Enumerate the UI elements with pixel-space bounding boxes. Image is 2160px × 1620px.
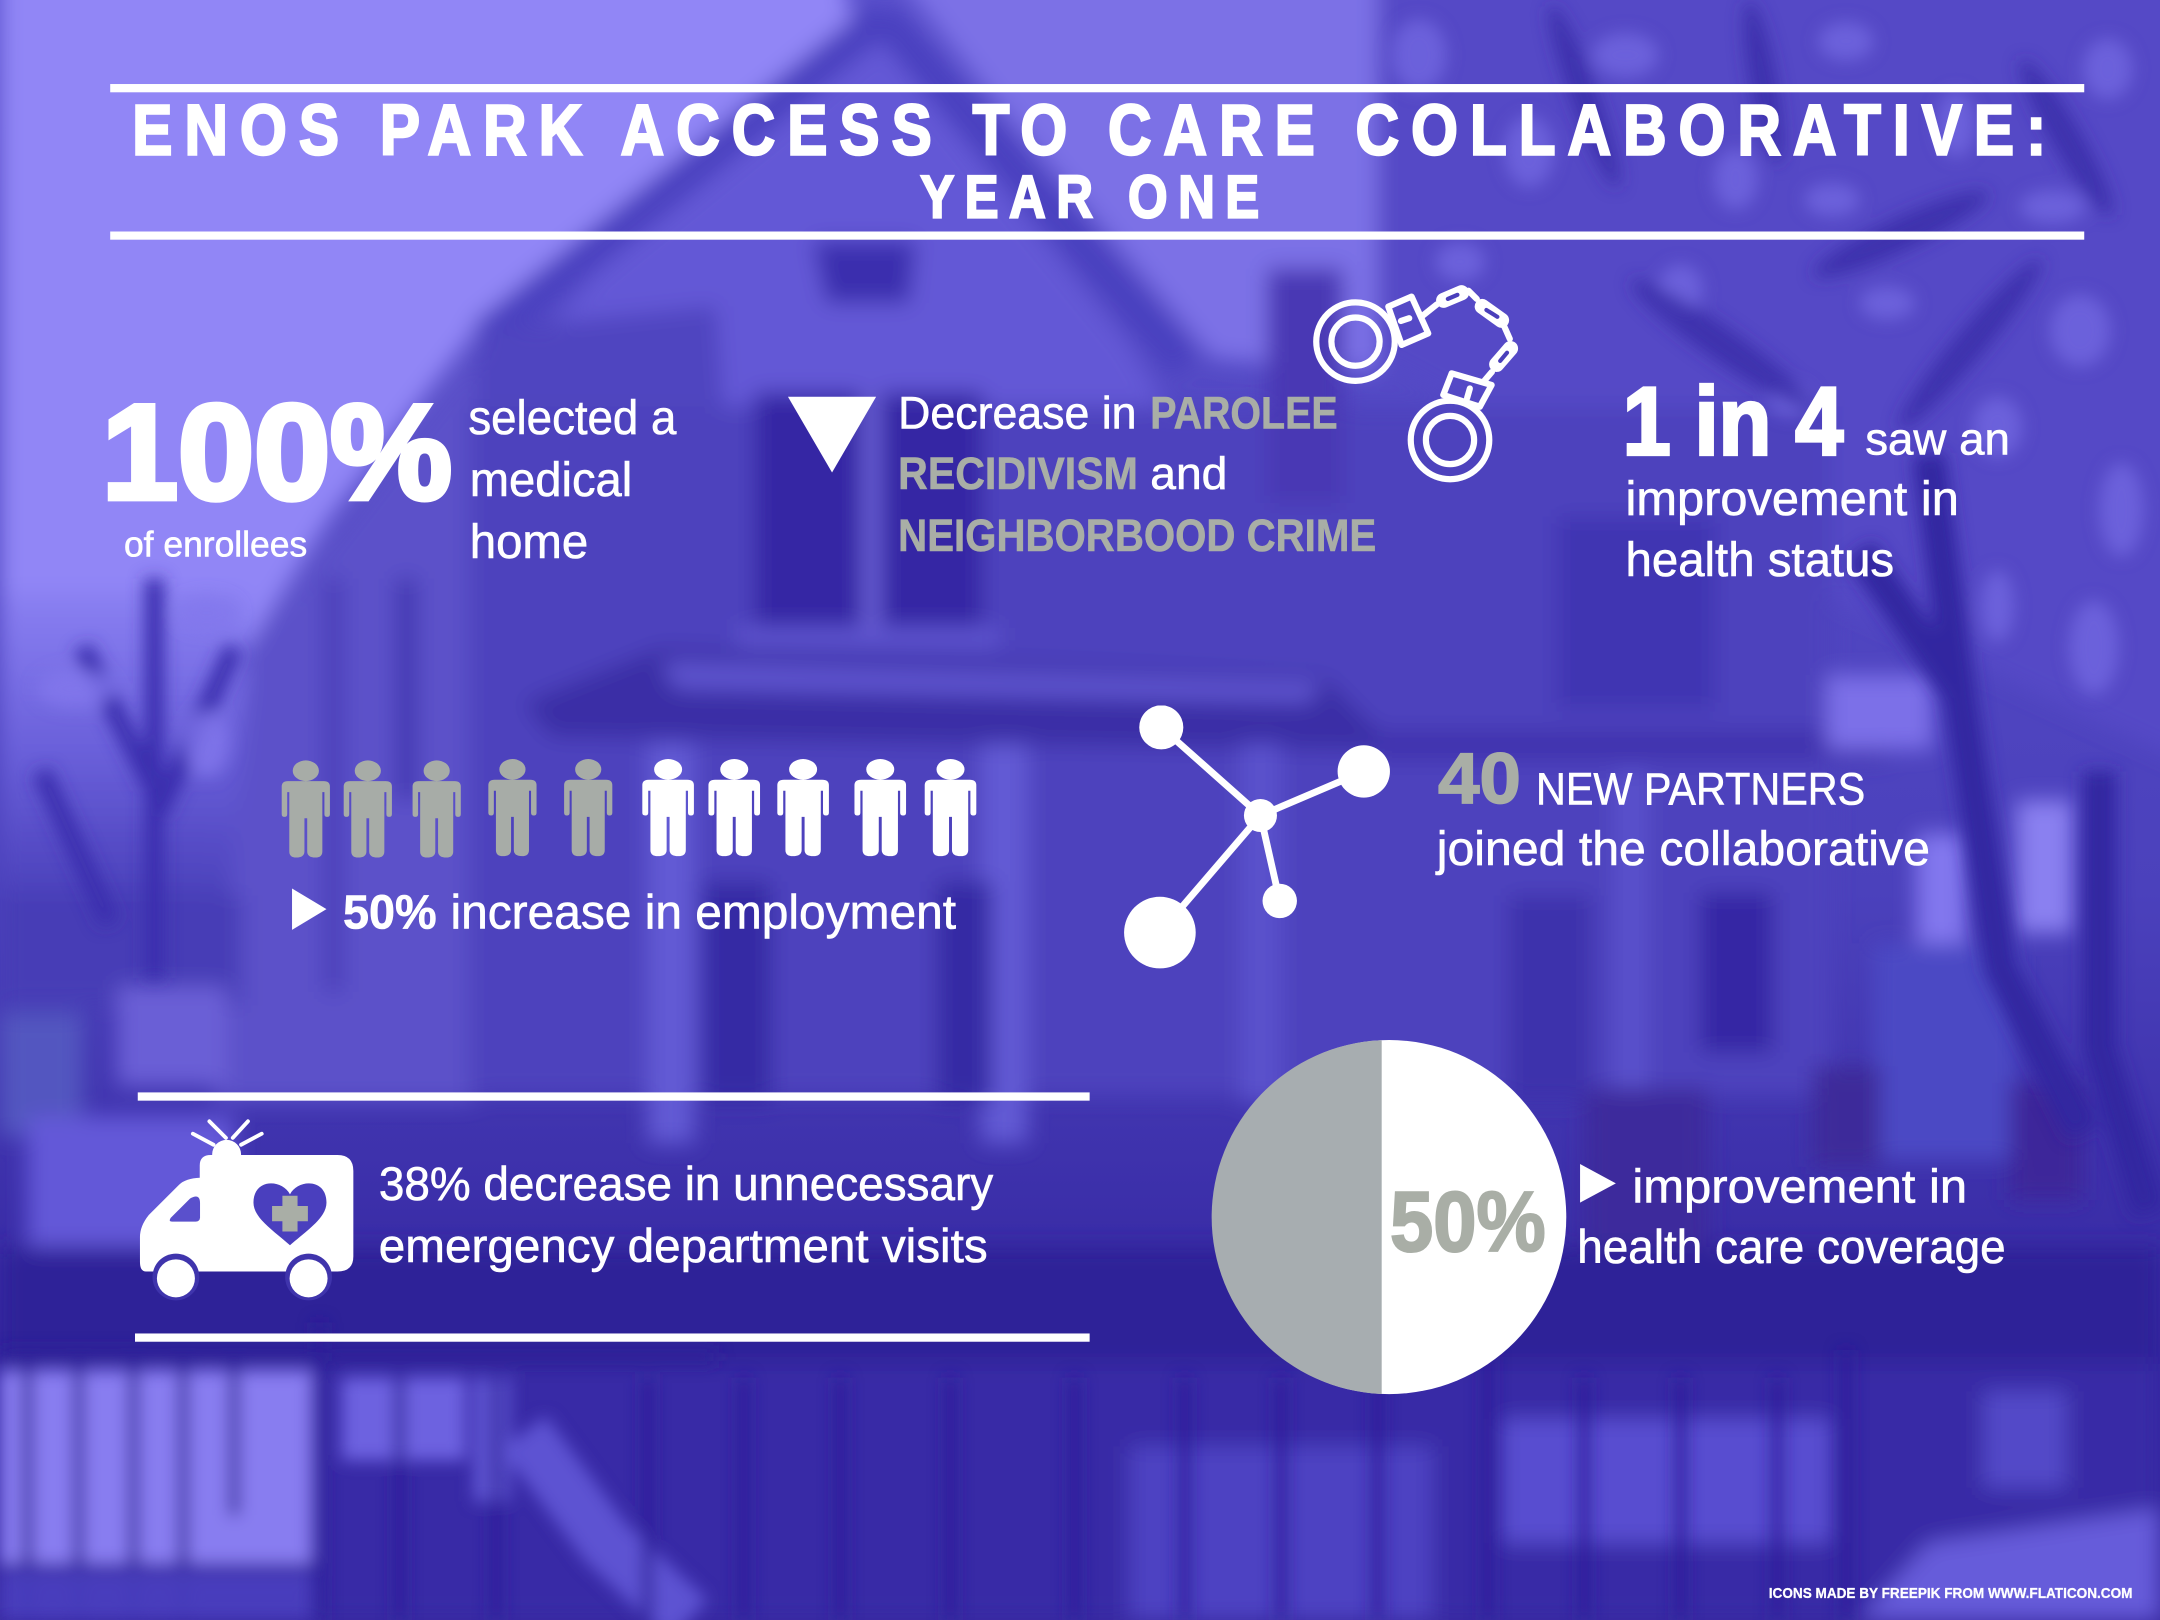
icon: right triangle — [1580, 1164, 1616, 1203]
stat: 50 percent increase in employment: 50% — [343, 885, 437, 939]
stat: 40 new partners — [1435, 739, 1930, 876]
pie chart: 50 percent health care coverage: 50% — [1390, 1175, 1546, 1270]
stat: 40 new partners: NEW PARTNERS — [1536, 763, 1865, 814]
title line one: ENOS PARK ACCESS TO CARE COLLABORATIVE: — [132, 90, 2046, 171]
icon: down triangle — [788, 397, 876, 472]
icon: partner network — [1124, 705, 1390, 968]
stat: 100 percent medical home: selected a — [468, 391, 677, 445]
panel: emergency department visits — [135, 1092, 1090, 1342]
stat: 1 in 4 improved health: saw an — [1865, 414, 2010, 465]
stat: 1 in 4 improved health — [1623, 369, 2010, 587]
left tree — [41, 579, 234, 978]
icon: right triangle — [292, 889, 326, 930]
fence bars — [0, 1371, 311, 1564]
stat: 1 in 4 improved health: improvement in — [1626, 472, 1959, 526]
stat: 50 percent increase in employment: increase in employment — [450, 885, 957, 939]
icon: ambulance — [140, 1121, 353, 1300]
stat: improvement in health care coverage: improvement in — [1632, 1161, 1967, 1213]
credit line: ICONS MADE BY FREEPIK FROM WWW.FLATICON.COM — [1769, 1586, 2132, 1602]
stat: decrease in recidivism and crime: Decrease in — [898, 387, 1136, 438]
stat: 100 percent medical home: of enrollees — [124, 525, 307, 565]
mottled tree canopy light spots — [1391, 19, 2143, 694]
icon: handcuffs — [1316, 291, 1510, 479]
stat: 40 new partners: 40 — [1438, 739, 1521, 819]
stat: decrease in recidivism and crime: and — [1150, 448, 1227, 499]
stat: 1 in 4 improved health: 1 in 4 — [1623, 369, 1843, 476]
stat: 100 percent medical home — [102, 377, 677, 569]
stat: 100 percent medical home: home — [470, 515, 588, 569]
pie chart: 50 percent health care coverage — [1212, 1040, 1566, 1394]
panel: emergency department visits: 38% decrease in unnecessary — [379, 1158, 994, 1210]
panel: emergency department visits: emergency department visits — [379, 1220, 988, 1272]
title block — [110, 84, 2084, 240]
stat: 100 percent medical home: medical — [470, 453, 632, 507]
stat: improvement in health care coverage — [1577, 1161, 2006, 1273]
stat: decrease in recidivism and crime — [788, 387, 1376, 561]
stat: decrease in recidivism and crime: PAROLEE — [1150, 387, 1338, 438]
stat: 40 new partners: joined the collaborative — [1435, 822, 1930, 876]
stat: improvement in health care coverage: health care coverage — [1577, 1221, 2006, 1273]
stat: 1 in 4 improved health: health status — [1626, 533, 1894, 587]
subtitle: YEAR ONE — [920, 162, 1259, 231]
pictogram: ten people, five grey five white — [282, 759, 976, 858]
stat: 100 percent medical home: 100% — [102, 377, 452, 528]
stat: decrease in recidivism and crime: RECIDIVISM — [898, 448, 1138, 499]
stat: decrease in recidivism and crime: NEIGHBORBOOD CRIME — [898, 510, 1376, 561]
